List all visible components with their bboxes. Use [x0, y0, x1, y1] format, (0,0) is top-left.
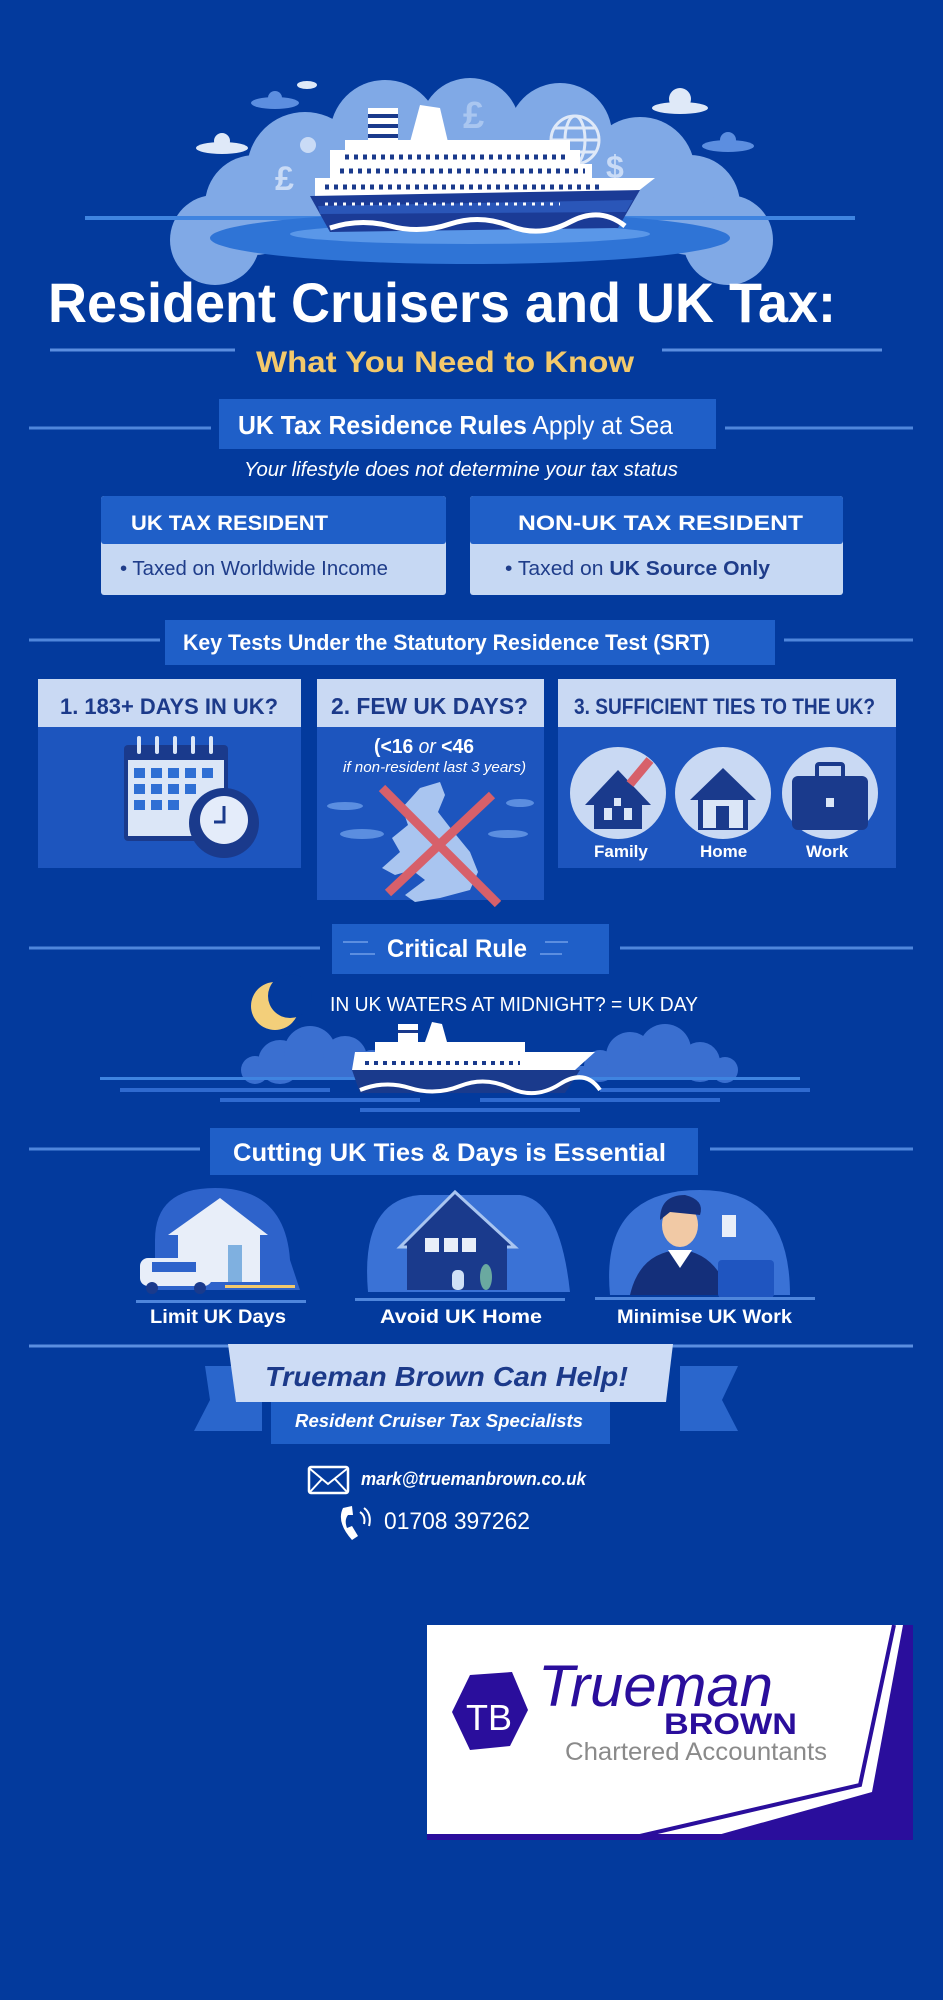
card 2: few UK days: [317, 679, 544, 904]
panel: non-UK tax resident: • Taxed on UK Source Only: [505, 558, 771, 580]
card 2: few UK days: if non-resident last 3 years): [343, 759, 526, 776]
logo: Trueman Brown Chartered Accountants: [427, 1625, 913, 1840]
hero illustration: cruise ship: [85, 78, 855, 285]
card 2: few UK days: (<16 or <46: [374, 736, 474, 758]
small clouds: [196, 81, 708, 154]
section heading: key tests SRT: [29, 620, 913, 665]
section heading: UK tax residence rules: [29, 399, 913, 449]
icon: minimise UK work: [595, 1190, 815, 1300]
card 1: 183+ days: [38, 679, 301, 868]
contact: email: mark@truemanbrown.co.uk: [361, 1469, 587, 1489]
panel: UK tax resident: • Taxed on Worldwide Income: [120, 558, 388, 580]
symbols: £: [275, 160, 294, 198]
icon: work briefcase: [782, 747, 878, 839]
logo: Trueman Brown Chartered Accountants: BROWN: [664, 1708, 797, 1741]
contact: email: [309, 1467, 587, 1493]
section heading: critical rule: Critical Rule: [387, 935, 527, 963]
icon: limit UK days (house and car): [136, 1188, 306, 1303]
night ship scene: [100, 1022, 810, 1110]
contact: phone: [341, 1506, 530, 1540]
banner: Trueman Brown can help: [194, 1344, 738, 1444]
water: [85, 216, 855, 220]
panel: UK tax resident: [101, 496, 446, 595]
icon: UK map crossed: [327, 782, 534, 904]
icon labels: Minimise UK Work: [617, 1307, 792, 1328]
hero illustration: cruise ship: £: [463, 95, 484, 137]
card 3: sufficient ties: [558, 679, 896, 868]
card 1: 183+ days: 1. 183+ DAYS IN UK?: [60, 694, 278, 719]
card 3: sufficient ties: 3. SUFFICIENT TIES TO THE UK?: [574, 694, 875, 719]
logo: Trueman Brown Chartered Accountants: Chartered Accountants: [565, 1738, 827, 1766]
section heading: cutting UK ties: Cutting UK Ties & Days is Essential: [233, 1139, 666, 1167]
hero illustration: cruise ship: $: [606, 149, 624, 185]
panel: non-UK tax resident: [470, 496, 843, 595]
logo: Trueman Brown Chartered Accountants: Trueman: [538, 1654, 773, 1719]
card 3: sufficient ties: Work: [806, 842, 849, 861]
icon: family: [570, 747, 666, 839]
card 3: sufficient ties: Home: [700, 842, 747, 861]
section heading: cutting UK ties: [29, 1128, 913, 1175]
ship: [310, 105, 655, 232]
big cloud backdrop: [170, 78, 773, 285]
card 3: sufficient ties: Family: [594, 842, 648, 861]
icon: moon: [251, 974, 312, 1030]
icon: home: [675, 747, 771, 839]
icon: avoid UK home: [355, 1192, 570, 1301]
section heading: key tests SRT: Key Tests Under the Statutory Residence Test (SRT): [183, 630, 710, 655]
text: midnight rule: IN UK WATERS AT MIDNIGHT? = UK DAY: [330, 994, 698, 1016]
icon labels: [150, 1307, 792, 1328]
section heading: critical rule: [29, 924, 913, 974]
card 2: few UK days: 2. FEW UK DAYS?: [331, 693, 528, 719]
icon labels: Limit UK Days: [150, 1307, 286, 1328]
icon: calendar with clock: [124, 738, 259, 858]
TB hexagon mark: [452, 1672, 528, 1750]
panel: UK tax resident: UK TAX RESIDENT: [131, 512, 328, 535]
TB hexagon mark: TB: [466, 1697, 512, 1738]
title: Resident Cruisers and UK Tax:: [48, 271, 836, 334]
text: lifestyle note: Your lifestyle does not determine your tax status: [244, 459, 678, 481]
subtitle: what you need to know: What You Need to Know: [256, 346, 635, 379]
contact: phone: 01708 397262: [384, 1508, 530, 1535]
section heading: UK tax residence rules: UK Tax Residence Rules Apply at Sea: [238, 410, 674, 440]
panel: non-UK tax resident: NON-UK TAX RESIDENT: [518, 512, 803, 535]
banner: Trueman Brown can help: Resident Cruiser Tax Specialists: [295, 1411, 583, 1431]
icon labels: Avoid UK Home: [380, 1307, 542, 1328]
banner: Trueman Brown can help: Trueman Brown Can Help!: [265, 1361, 628, 1392]
